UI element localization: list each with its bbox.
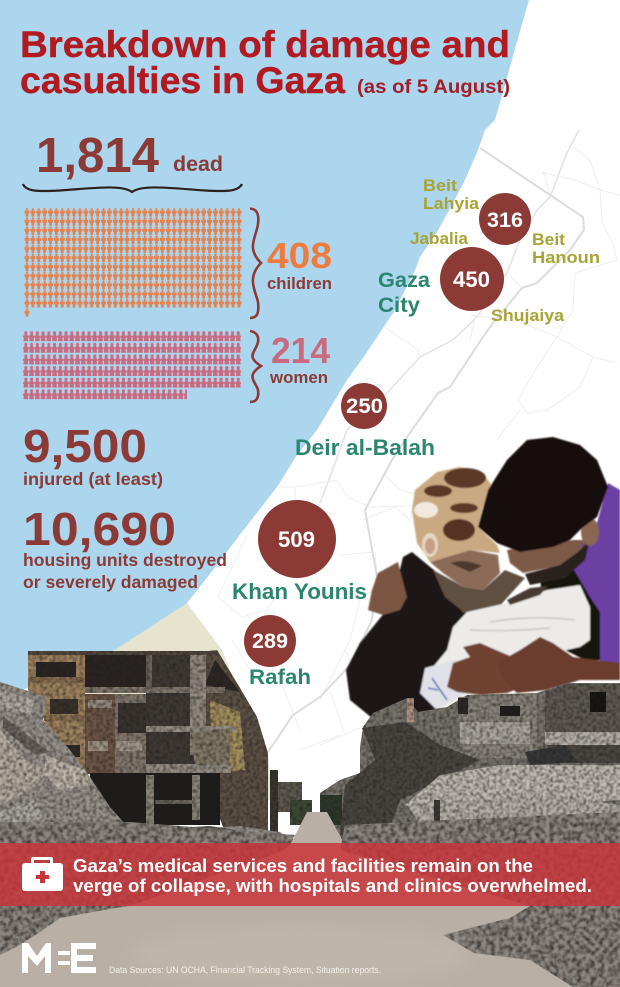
stat: 1,814 dead xyxy=(36,129,223,183)
marker: 289: 289 xyxy=(252,630,288,653)
map labels: north neighbourhoods: Lahyia xyxy=(423,194,480,213)
label: Rafah: Rafah xyxy=(249,666,311,689)
photo: bombed houses on the right xyxy=(320,683,620,850)
map labels: north neighbourhoods: Beit xyxy=(532,230,565,249)
marker: 450: 450 xyxy=(453,267,490,292)
marker: 250: 250 xyxy=(346,395,383,418)
upper right wing xyxy=(200,650,268,832)
title xyxy=(20,24,510,101)
data sources: Data Sources: UN OCHA, Financial Tracking System, Situation reports. xyxy=(109,965,381,975)
stat: housing units: or severely damaged xyxy=(23,572,198,592)
right section floors xyxy=(146,653,202,775)
map labels: north neighbourhoods: Beit xyxy=(423,176,457,195)
stat: injured xyxy=(23,420,163,489)
map labels: north neighbourhoods: Shujaiya xyxy=(491,306,565,325)
stat: 214 women xyxy=(269,330,330,387)
callout band: medical services xyxy=(0,843,620,906)
brace over people grids xyxy=(23,184,242,192)
marker: 316: 316 xyxy=(487,209,523,232)
white cloth wrapping the child xyxy=(420,585,590,710)
logo: MEE xyxy=(22,943,96,973)
marker: 450 xyxy=(440,247,504,311)
stat: 1,814 dead: dead xyxy=(173,152,223,176)
stat: housing units: 10,690 xyxy=(23,503,176,555)
child's head xyxy=(507,586,548,605)
marker: 250 xyxy=(341,383,387,429)
background: sinai territory xyxy=(30,603,272,800)
rubble along the right of the road xyxy=(340,812,620,987)
rubble along the left of the road xyxy=(0,822,295,955)
stat: 214 women: 214 xyxy=(271,330,330,371)
collapsed dark structure xyxy=(340,722,480,840)
title: casualties in Gaza xyxy=(20,60,345,101)
distant buildings and trees xyxy=(270,770,278,832)
brace: women xyxy=(250,331,261,402)
brace: children xyxy=(250,208,261,318)
photo: rubble pile on the left xyxy=(0,682,300,845)
label: Gaza City: Gaza xyxy=(378,268,431,292)
woman's headscarf xyxy=(412,467,500,562)
pictogram: women xyxy=(23,331,241,401)
ground floor xyxy=(90,773,220,825)
stat: 1,814 dead: 1,814 xyxy=(36,129,159,183)
map: district lines of the Gaza Strip xyxy=(218,130,620,760)
stat: housing units: housing units destroyed xyxy=(23,550,227,570)
title: Breakdown of damage and xyxy=(20,24,510,65)
stat: 214 women: women xyxy=(269,368,328,387)
label: Khan Younis: Khan Younis xyxy=(232,579,367,604)
woman's hand on shoulder xyxy=(368,562,407,615)
photo: grieving family xyxy=(346,437,620,725)
stat: housing units xyxy=(23,503,227,592)
stat: injured: 9,500 xyxy=(23,420,147,472)
photo: road and rubble at the bottom xyxy=(0,812,620,987)
marker: 289 xyxy=(244,615,296,667)
photo: ruined apartment block xyxy=(28,650,312,832)
label: Gaza City xyxy=(378,268,431,317)
brown middle section xyxy=(85,694,116,774)
man's dark torso xyxy=(540,563,603,660)
stat: 408 children: 408 xyxy=(267,235,332,276)
map labels: north neighbourhoods xyxy=(410,176,600,325)
title: (as of 5 August) xyxy=(357,77,510,98)
pale concrete slabs xyxy=(405,765,620,810)
stat: 408 children xyxy=(267,235,332,293)
stat: injured: injured (at least) xyxy=(23,469,163,489)
label: Gaza City: City xyxy=(378,293,420,317)
callout text xyxy=(73,856,592,896)
woman's scarf, lower part xyxy=(433,570,525,613)
road xyxy=(0,812,620,987)
hands holding the child xyxy=(447,643,533,695)
marker: 509: 509 xyxy=(278,527,315,552)
woman's face xyxy=(430,550,500,590)
label: Deir al-Balah: Deir al-Balah xyxy=(295,435,435,460)
callout text: Gaza’s medical services and facilities remain on the xyxy=(73,856,533,876)
damaged house xyxy=(458,695,537,758)
background: sea xyxy=(0,0,529,700)
man's purple shirt xyxy=(570,483,620,663)
map: border of the Gaza Strip xyxy=(268,148,584,752)
distant trees xyxy=(320,795,342,825)
man's face xyxy=(507,540,585,573)
marker: 316 xyxy=(479,193,531,245)
rubble silhouette xyxy=(320,683,620,850)
stat: 408 children: children xyxy=(267,274,332,293)
man's ear xyxy=(581,518,599,546)
far right building xyxy=(545,684,620,745)
man's hair xyxy=(478,437,608,552)
woman's dark robe xyxy=(346,552,500,725)
callout text: verge of collapse, with hospitals and clinics overwhelmed. xyxy=(73,876,592,896)
pictogram: children xyxy=(24,208,242,317)
tan left section xyxy=(28,654,85,772)
icon: medical case xyxy=(22,857,63,891)
map labels: north neighbourhoods: Hanoun xyxy=(532,248,600,267)
map labels: north neighbourhoods: Jabalia xyxy=(410,229,469,248)
road light patch xyxy=(130,925,470,985)
marker: 509 xyxy=(258,500,336,578)
